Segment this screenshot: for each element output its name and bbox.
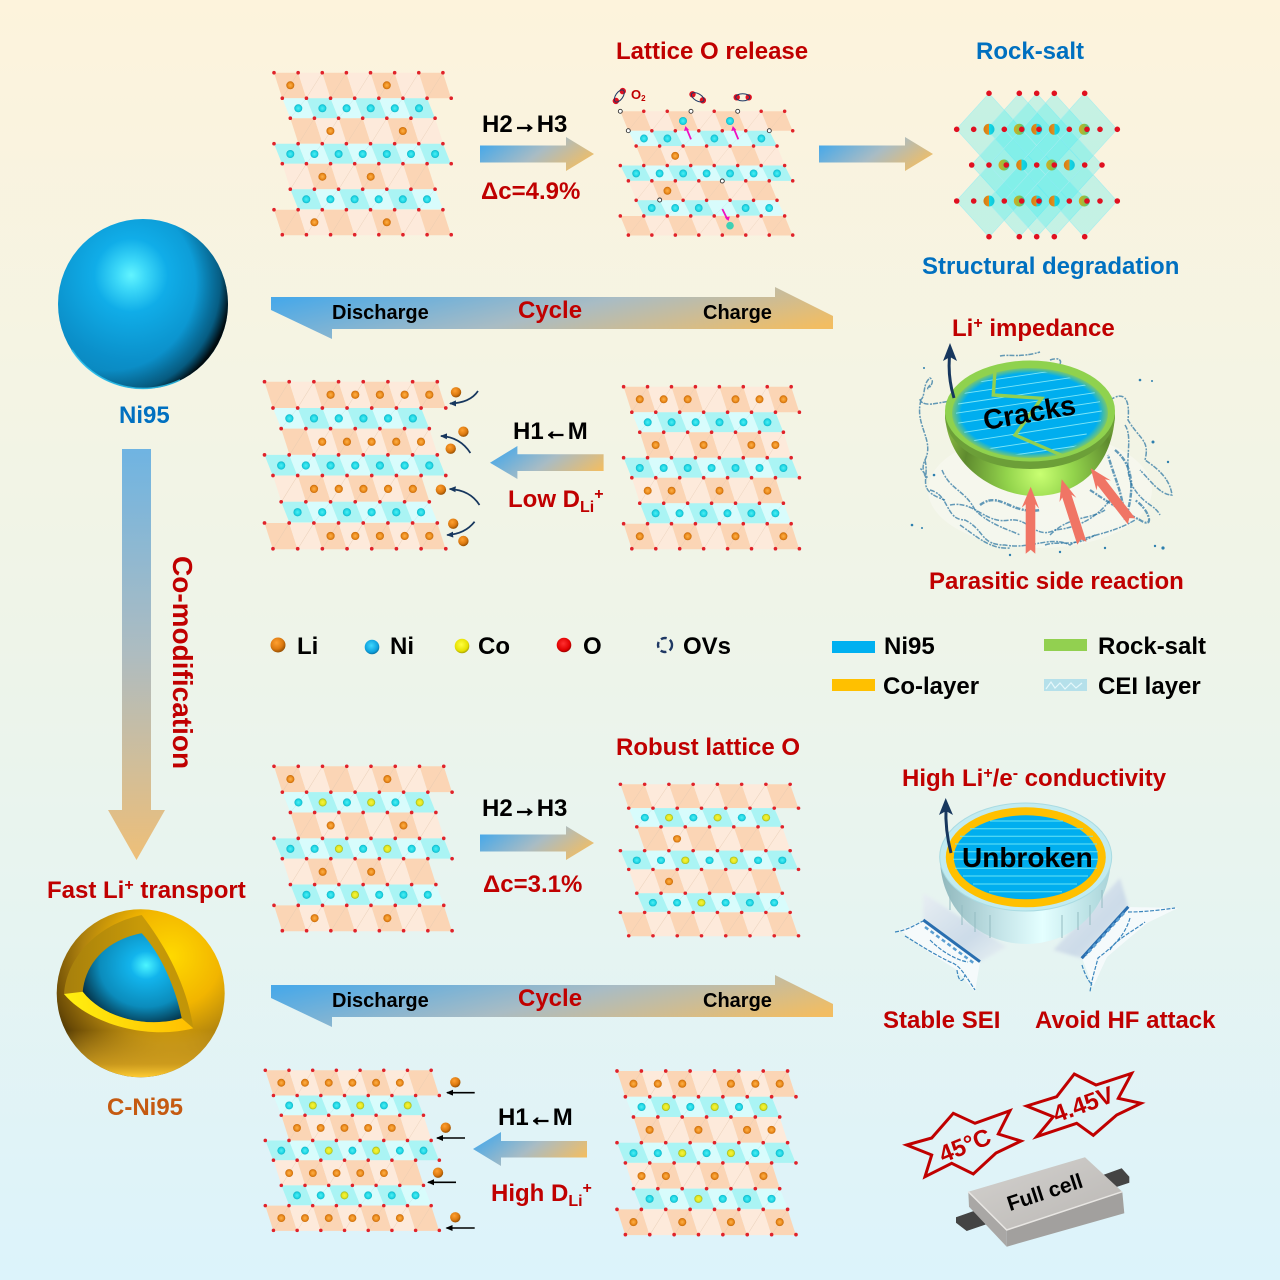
label: Low D Li+: Li (580, 499, 594, 516)
legend: materials: Rock-salt (1098, 633, 1206, 660)
label: High conductivity: - (1013, 765, 1018, 782)
label: Fast Li+ transport: Fast Li (47, 877, 124, 904)
label: Parasitic side reaction: Parasitic side reaction (929, 568, 1184, 595)
legend: materials (832, 633, 1206, 700)
lattice: oxygen release (618, 109, 794, 237)
band arrow: cycle top: Discharge (332, 302, 429, 324)
lattice: pristine top (272, 71, 453, 236)
label: High conductivity: High Li (902, 765, 983, 792)
label: Unbroken: Unbroken (962, 842, 1093, 873)
label: Lattice O release: Lattice O release (616, 38, 808, 65)
lattice: fast Li discharge (264, 1069, 441, 1232)
band arrow: cycle bottom (271, 975, 833, 1027)
label: Li+ impedance: impedance (983, 315, 1115, 342)
lattice: robust H3 (619, 783, 800, 937)
label: delta c 4.9: Δc=4.9% (481, 178, 580, 205)
rock-salt structure (954, 90, 1120, 240)
label: Structural degradation: Structural degradation (922, 253, 1179, 280)
splash: right HF (1053, 878, 1178, 992)
full cell battery: Full cell (1004, 1170, 1086, 1216)
lattice: discharge with Li stuck (263, 380, 448, 551)
legend: atoms: O (583, 633, 602, 660)
molecules: O2 release (611, 86, 752, 106)
label: Avoid HF attack: Avoid HF attack (1035, 1007, 1216, 1034)
free Li with straight arrows (428, 1077, 475, 1228)
splash behind cracked disc (911, 352, 1172, 556)
arrows: parasitic attack (1022, 463, 1138, 554)
legend: atoms: OVs (683, 633, 731, 660)
legend: atoms (270, 633, 731, 660)
label: H1 from M lower: H1←M (498, 1104, 573, 1131)
label: C-Ni95: C-Ni95 (107, 1094, 183, 1121)
label: High D Li+: Li (568, 1193, 583, 1210)
label: Fast Li+ transport: transport (134, 877, 246, 904)
lattice: charged state (622, 385, 801, 550)
legend: materials: Co-layer (883, 673, 979, 700)
label: High conductivity: conductivity (1018, 765, 1167, 792)
label: H2 to H3 lower: H2→H3 (482, 795, 567, 822)
label: High D Li+: + (583, 1180, 592, 1197)
star badge: 45C: 45°C (935, 1123, 995, 1169)
label: High D Li+: High D (491, 1180, 568, 1207)
label: Low D Li+: + (594, 486, 604, 503)
legend: atoms: Li (297, 633, 318, 660)
lattice: Co modified top-left (272, 764, 454, 933)
band arrow: cycle top (271, 287, 833, 339)
label: Fast Li+ transport: + (124, 877, 134, 894)
label: Stable SEI: Stable SEI (883, 1007, 1000, 1034)
sphere: Ni95 (58, 219, 228, 389)
label: Robust lattice O: Robust lattice O (616, 734, 800, 761)
label: Li+ impedance: Li (952, 315, 973, 342)
band arrow: cycle top: Cycle (518, 297, 582, 324)
legend: atoms: Co (478, 633, 510, 660)
arrow: H2 to H3 lower (480, 826, 594, 860)
legend: materials: Ni95 (884, 633, 935, 660)
arrow: Co-modification (108, 449, 165, 860)
label: Li+ impedance: + (973, 315, 983, 332)
arrow: H1 from M lower (473, 1132, 587, 1166)
star badge: 4.45V: 4.45V (1049, 1082, 1118, 1128)
molecules: O2 release: 2 (641, 94, 646, 103)
arrow: navy impedance (943, 343, 957, 398)
sphere: C-Ni95 cutaway (57, 909, 225, 1077)
label: High conductivity: /e (993, 765, 1013, 792)
arrow: navy conductivity (939, 798, 953, 853)
star badge: 45C (907, 1111, 1021, 1177)
disc: unbroken C-Ni95 (940, 803, 1112, 944)
disc: cracked Ni95 with rock-salt (945, 360, 1115, 496)
label: High conductivity: + (983, 765, 993, 782)
label: Co-modification: Co-modification (167, 556, 198, 769)
arrow: to rock-salt (819, 137, 933, 171)
full cell battery (956, 1157, 1129, 1247)
star badge: 4.45V (1027, 1073, 1141, 1137)
free Li with curved arrows (436, 387, 480, 546)
lattice: fast Li charged (615, 1069, 798, 1236)
legend: materials: CEI layer (1098, 673, 1201, 700)
label: Low D Li+: Low D (508, 486, 580, 513)
molecules: O2 release: O (631, 87, 641, 102)
band arrow: cycle bottom: Cycle (518, 985, 582, 1012)
label: Cracks: Cracks (981, 389, 1078, 436)
label: H1 from M: H1←M (513, 418, 588, 445)
band arrow: cycle bottom: Charge (703, 990, 772, 1012)
label: Ni95: Ni95 (119, 402, 170, 429)
label: delta c 3.1: Δc=3.1% (483, 871, 582, 898)
arrow: H2 to H3 (480, 137, 594, 171)
band arrow: cycle top: Charge (703, 302, 772, 324)
splash: left SEI (895, 893, 1007, 992)
band arrow: cycle bottom: Discharge (332, 990, 429, 1012)
arrow: H1 from M (490, 446, 604, 479)
label: H2 to H3: H2→H3 (482, 111, 567, 138)
label: Rock-salt: Rock-salt (976, 38, 1084, 65)
legend: atoms: Ni (390, 633, 414, 660)
